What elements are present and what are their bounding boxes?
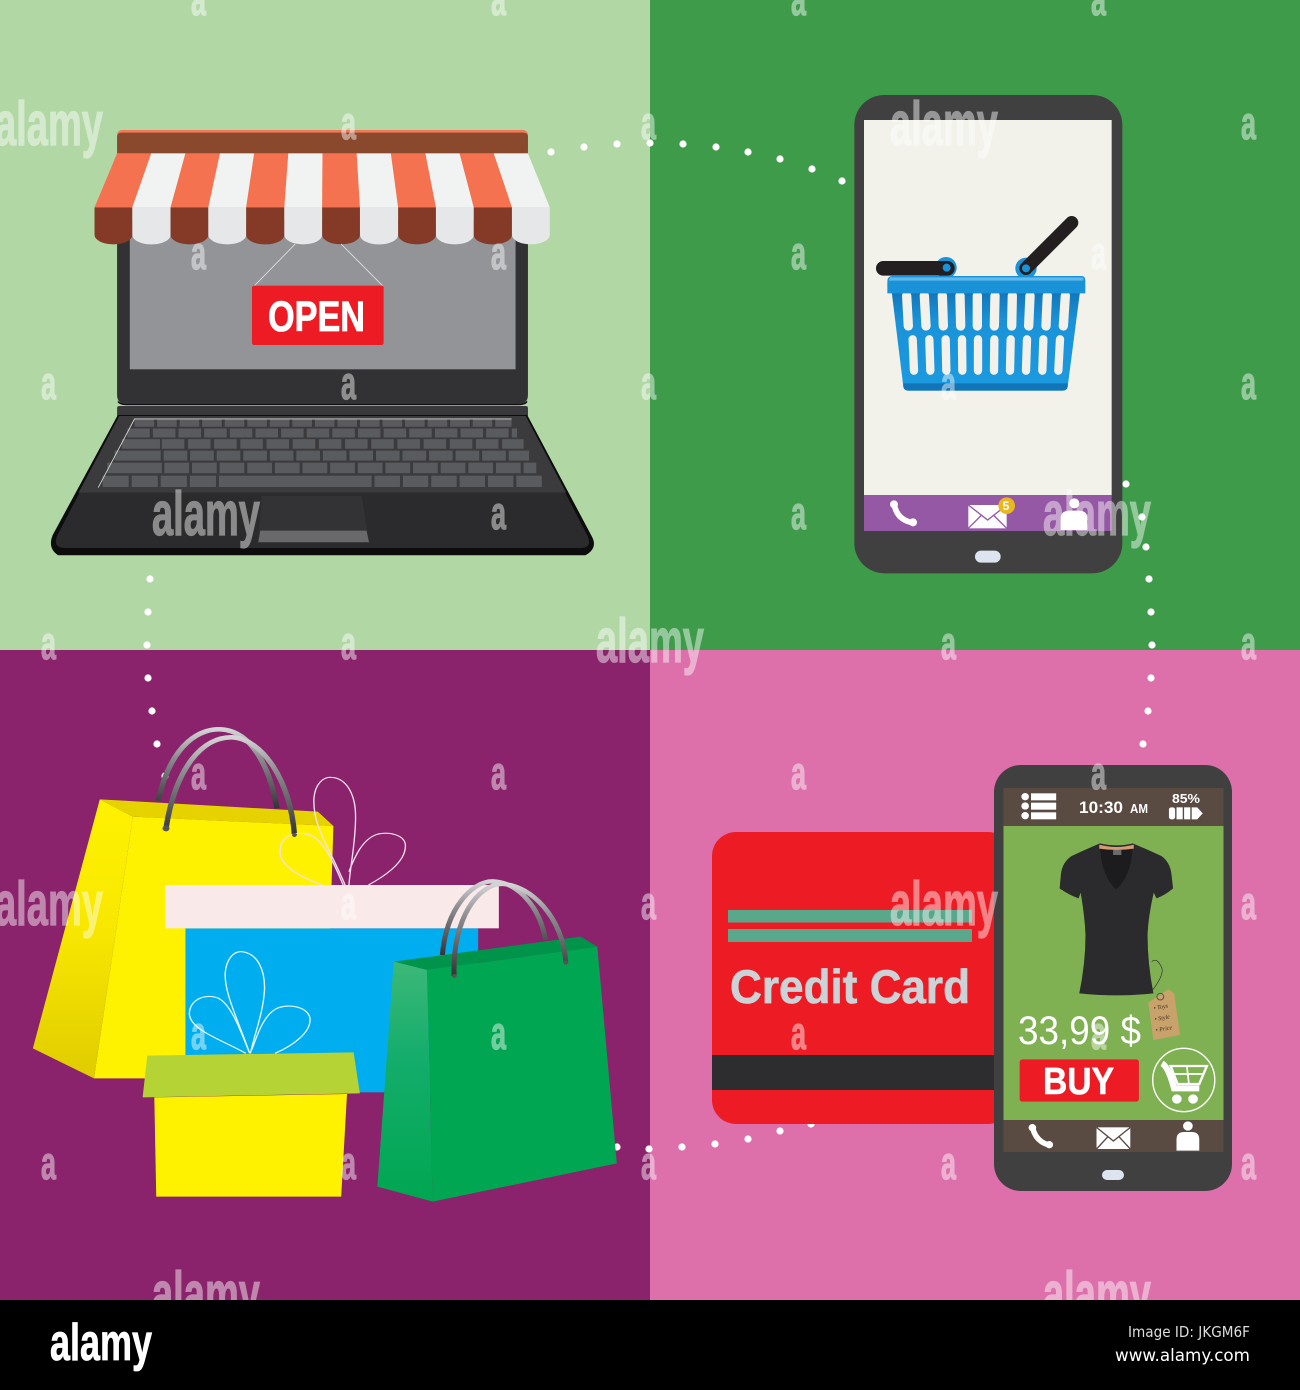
watermarks: alamy [890,90,998,159]
sign wires [255,244,383,286]
product screen [1004,826,1224,1120]
icon: handset [894,505,913,523]
phone details [1020,793,1215,1151]
yellow bag back handle [158,729,277,808]
green bag back handle [442,881,546,955]
watermarks: a [941,357,956,409]
watermarks: a [491,747,506,799]
watermarks: alamy [890,870,998,939]
laptop storefront [51,130,594,555]
card body [712,832,1012,1124]
watermarks: alamy [1043,480,1151,549]
footer logo: alamy [50,1314,152,1372]
icon: person [1183,1121,1193,1131]
laptop lid [117,220,528,404]
am label: AM [1130,802,1148,816]
bottom bar [1004,1120,1224,1152]
watermarks: a [641,877,656,929]
watermarks: a [41,357,56,409]
watermarks: a [641,357,656,409]
handle eyelets [162,825,568,978]
basket body [892,292,1080,391]
trackpad [258,496,369,542]
phone drawing [854,95,1122,573]
panel: light green background [0,0,650,650]
smartphone with shopping basket [854,95,1122,573]
watermarks: a [491,1007,506,1059]
awning bar [117,130,528,153]
watermarks: alamy [0,90,103,159]
watermarks: a [1091,1007,1106,1059]
watermarks: a [341,617,356,669]
watermarks: a [1241,617,1256,669]
awning valance [95,207,132,244]
tag text: • Price [1155,1025,1173,1034]
tag text [1153,1003,1173,1034]
tag text: • Toys [1153,1003,1169,1012]
watermarks: a [641,97,656,149]
watermarks: a [791,227,806,279]
yellow bag side [33,799,133,1078]
basket slots [907,296,1065,371]
icon: cart [1162,1063,1207,1103]
small yellow gift box [154,1094,347,1197]
icon: cart circle [1153,1048,1215,1112]
basket left handle [935,257,957,278]
credit card [712,832,1012,1124]
card stripes [728,910,972,942]
phone shell [994,765,1232,1191]
watermarks: a [341,1137,356,1189]
laptop base [51,415,594,555]
watermarks: alamy [152,1260,260,1329]
green bag front handle [454,884,566,976]
clock: 10:30 [1079,798,1123,817]
magnetic band [712,1055,1012,1090]
home button [1102,1170,1124,1180]
dotted connector arrows [143,139,1156,1153]
awning stripes [95,153,151,207]
green bag inside [394,937,597,970]
watermarks: a [791,487,806,539]
green bag side [377,962,433,1202]
t-shirt [1060,843,1173,995]
icon: battery [1169,807,1203,819]
watermarks: alamy [1043,1260,1151,1329]
small gift box lid [143,1052,360,1097]
watermarks: a [941,1137,956,1189]
watermarks: a [41,617,56,669]
panel: pink background [650,650,1300,1300]
home button [975,551,1001,563]
yellow bag front handle [166,737,294,835]
image id: Image ID: JKGM6F [1128,1323,1250,1341]
phone body [854,95,1122,573]
watermarks: a [341,357,356,409]
hinge [117,406,528,417]
watermarks: a [191,227,206,279]
laptop screen [130,220,516,369]
watermarks: alamy [596,607,704,676]
watermarks: a [341,877,356,929]
battery percent: 85% [1172,791,1200,806]
panel: purple background [0,650,650,1300]
watermarks: a [491,227,506,279]
watermarks: a [1241,877,1256,929]
icon: notification badge [998,497,1015,514]
icon: menu [1021,793,1056,819]
watermarks: a [1241,357,1256,409]
watermarks: a [941,617,956,669]
price tag [1150,960,1162,993]
watermarks: a [341,97,356,149]
watermarks: alamy [0,870,103,939]
watermarks: a [41,1137,56,1189]
watermarks: a [191,747,206,799]
green bag front [427,947,617,1202]
footer bar [0,1300,1300,1390]
open sign text: OPEN [268,293,365,341]
smartphone with product page [994,765,1232,1191]
green bag [377,937,617,1202]
icon: person [1069,498,1079,508]
icon: envelope [1097,1127,1130,1149]
price: 33,99 $ [1018,1009,1141,1053]
buy button [1020,1059,1139,1102]
watermarks: a [791,747,806,799]
yellow bag front [94,817,333,1078]
watermarks: a [1241,97,1256,149]
watermarks: a [1241,1137,1256,1189]
keyboard [103,423,544,481]
watermarks: a [191,1007,206,1059]
open sign board [252,286,384,345]
watermarks: a [791,1007,806,1059]
watermarks: a [1091,227,1106,279]
icon: handset [1033,1128,1049,1145]
phone screen [864,120,1112,495]
icon: envelope [968,505,1007,528]
watermarks: a [641,1137,656,1189]
blue gift box lid [165,885,499,928]
blue gift box [185,928,478,1092]
tag text: • Style [1154,1014,1171,1023]
purple app bar [864,495,1112,531]
watermarks: a [491,487,506,539]
yellow bag [33,799,333,1078]
laptop drawing [51,130,594,555]
basket right handle [1015,258,1037,279]
upper gift ribbon [280,777,405,885]
watermarks: alamy [152,480,260,549]
card label: Credit Card [730,960,970,1013]
footer url: www.alamy.com [1115,1346,1250,1366]
shopping bags and gift boxes [33,729,617,1202]
watermarks: a [1091,747,1106,799]
status bar [1004,788,1224,826]
basket rim [887,276,1085,293]
yellow bag inside [100,799,333,826]
panel: dark green background [650,0,1300,650]
lower gift ribbon [189,952,310,1053]
badge number: 5 [1003,499,1010,513]
buy label: BUY [1043,1061,1114,1103]
